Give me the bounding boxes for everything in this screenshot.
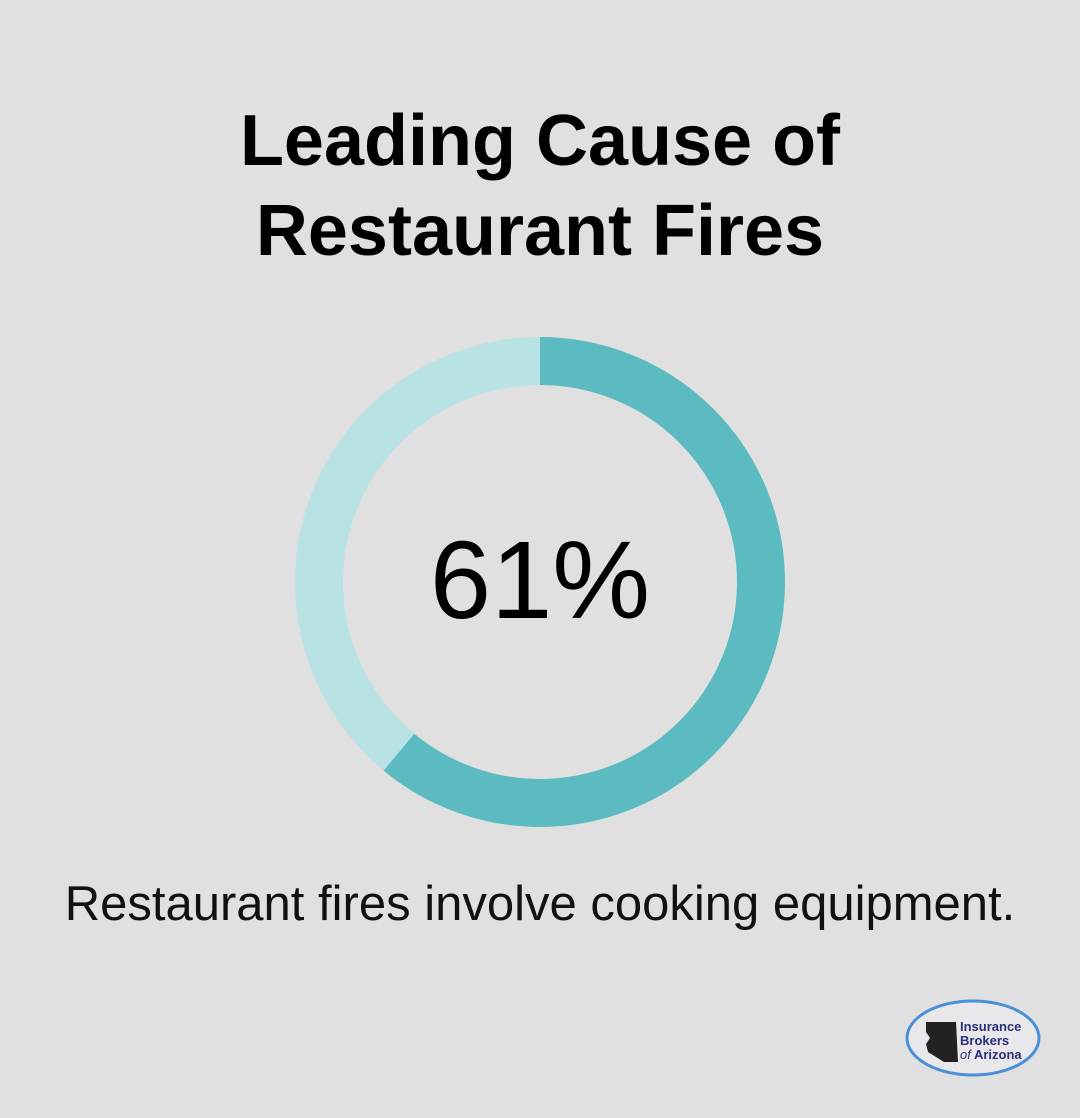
title: Restaurant Fires — [256, 191, 824, 271]
caption: Restaurant fires involve cooking equipment. — [65, 877, 1015, 931]
title: Leading Cause of — [240, 101, 840, 181]
title — [240, 101, 840, 271]
donut value arc 61% — [319, 361, 761, 803]
donut track — [319, 361, 761, 803]
logo: of Arizona — [960, 1047, 1022, 1062]
percentage value: 61% — [430, 519, 650, 642]
logo: Brokers — [960, 1033, 1009, 1048]
logo — [906, 1000, 1040, 1076]
logo: Insurance — [960, 1019, 1021, 1034]
